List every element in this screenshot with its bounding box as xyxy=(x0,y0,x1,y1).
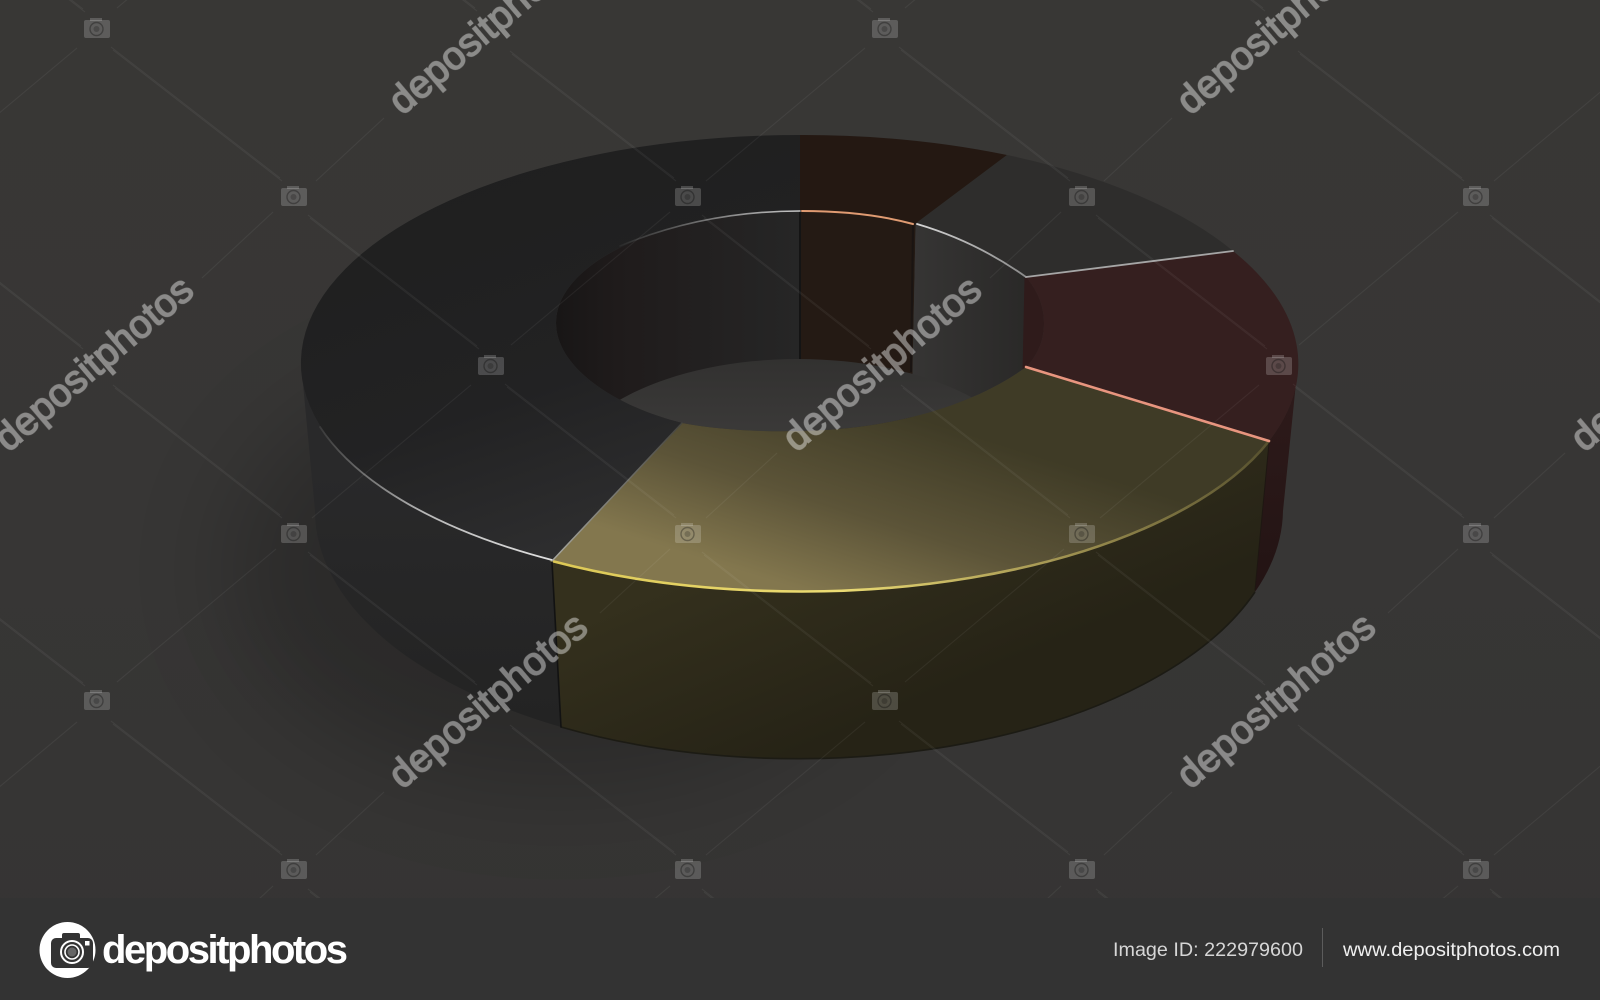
watermark camera icons xyxy=(84,18,1489,879)
diagonal depositphotos watermarks: depositphotos xyxy=(380,605,596,797)
top face: grey segment xyxy=(915,155,1233,277)
top face: gold segment xyxy=(552,367,1269,591)
outer wall: black segment xyxy=(301,363,561,727)
top face: brown segment xyxy=(800,135,1007,224)
diagonal depositphotos watermarks xyxy=(0,0,1600,797)
top face: black segment xyxy=(301,135,800,561)
footer logo wordmark: depositphotos xyxy=(102,928,348,972)
footer divider xyxy=(1322,928,1323,967)
ground shadow of the donut xyxy=(230,355,890,785)
footer image id: Image ID: 222979600 xyxy=(1113,939,1303,961)
outer wall: red segment xyxy=(1255,363,1298,592)
3D donut chart xyxy=(301,135,1298,759)
outer wall: gold segment xyxy=(552,441,1269,759)
donut hole interior xyxy=(556,211,1044,431)
base contact line xyxy=(561,592,1255,759)
diagonal depositphotos watermarks: depositphotos xyxy=(774,268,990,460)
footer logo icon: camera in circle xyxy=(40,922,96,978)
diagonal depositphotos watermarks: depositphotos xyxy=(1168,605,1384,797)
top face: red segment xyxy=(1026,251,1298,441)
footer website url: www.depositphotos.com xyxy=(1342,939,1560,961)
rim highlights xyxy=(320,211,1269,727)
footer bar xyxy=(0,898,1600,1000)
